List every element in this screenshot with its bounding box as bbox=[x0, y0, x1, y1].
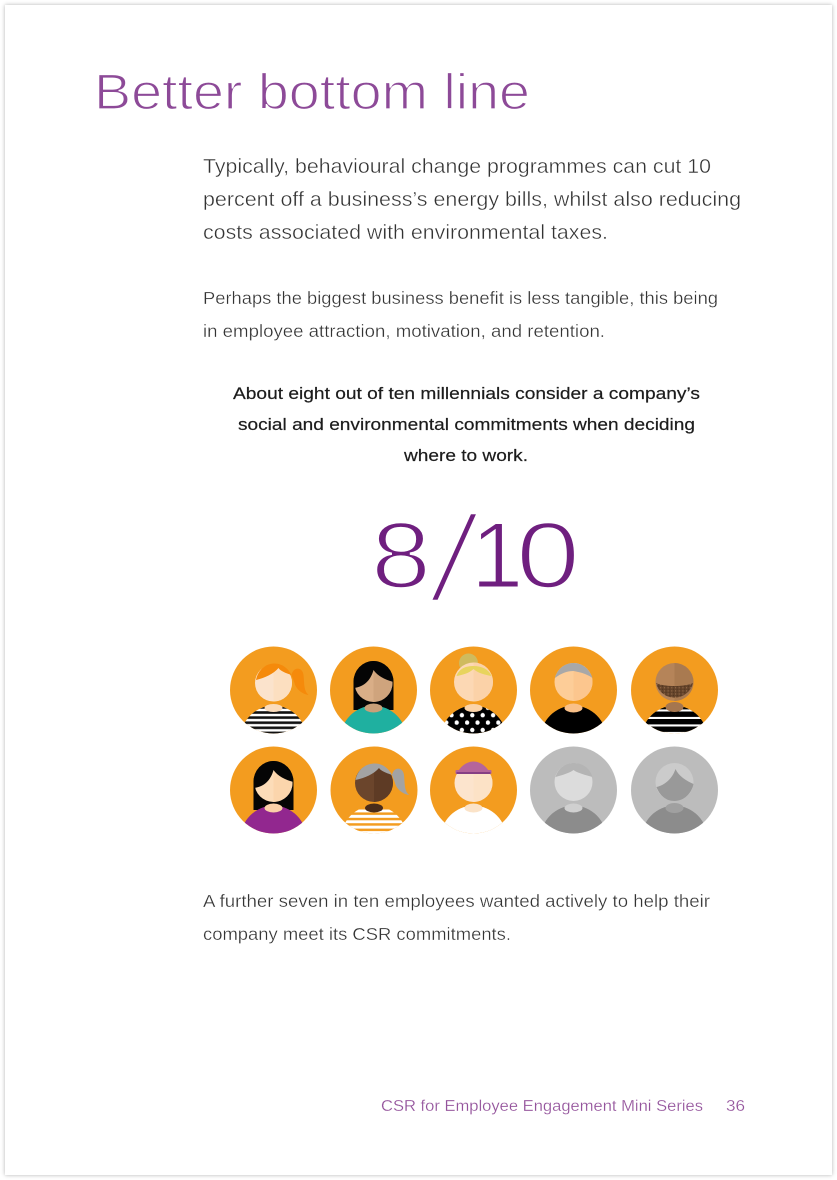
highlighted statement: About eight out of ten millennials consider a company’s bbox=[233, 384, 700, 403]
avatar 2: long black hair, teal top bbox=[330, 646, 417, 734]
people grid: eight out of ten highlighted bbox=[230, 646, 718, 834]
intro paragraph: costs associated with environmental taxes. bbox=[203, 221, 608, 244]
intro paragraph bbox=[203, 155, 741, 244]
title: Better bottom line bbox=[94, 63, 530, 120]
big statistic 8/10 bbox=[371, 493, 580, 626]
avatar 1: red ponytail, striped top bbox=[230, 646, 317, 734]
footer: CSR for Employee Engagement Mini Series bbox=[381, 1098, 703, 1115]
closing paragraph bbox=[203, 891, 710, 944]
second paragraph: Perhaps the biggest business benefit is less tangible, this being bbox=[203, 288, 718, 308]
highlighted statement bbox=[233, 384, 700, 465]
highlighted statement: where to work. bbox=[403, 446, 528, 465]
big statistic 8/10: 0 bbox=[516, 502, 580, 608]
intro paragraph: percent off a business’s energy bills, whilst also reducing bbox=[203, 188, 741, 211]
avatar 4: grey hair, black top bbox=[530, 646, 617, 734]
avatar 10: grey inactive figure with darker face bbox=[631, 746, 718, 834]
second paragraph bbox=[203, 288, 718, 341]
footer: 36 bbox=[726, 1098, 745, 1115]
big statistic 8/10: 8 bbox=[371, 502, 431, 608]
avatar 7: brown skin, grey ponytail, orange striped top bbox=[330, 746, 418, 834]
avatar 9: grey inactive figure bbox=[530, 746, 617, 834]
avatar 3: blonde bun, polka dot top bbox=[430, 646, 517, 734]
avatar 5: bearded man, black and white striped top bbox=[631, 646, 718, 734]
avatar 6: long black hair, purple top bbox=[230, 746, 317, 834]
avatar 8: purple cap, white top bbox=[430, 746, 517, 834]
big statistic 8/10: 1 bbox=[471, 502, 523, 608]
closing paragraph: A further seven in ten employees wanted actively to help their bbox=[203, 891, 710, 911]
closing paragraph: company meet its CSR commitments. bbox=[203, 924, 511, 944]
big statistic 8/10: / bbox=[425, 493, 483, 626]
intro paragraph: Typically, behavioural change programmes can cut 10 bbox=[203, 155, 711, 178]
second paragraph: in employee attraction, motivation, and retention. bbox=[203, 321, 605, 341]
highlighted statement: social and environmental commitments when deciding bbox=[238, 415, 695, 434]
